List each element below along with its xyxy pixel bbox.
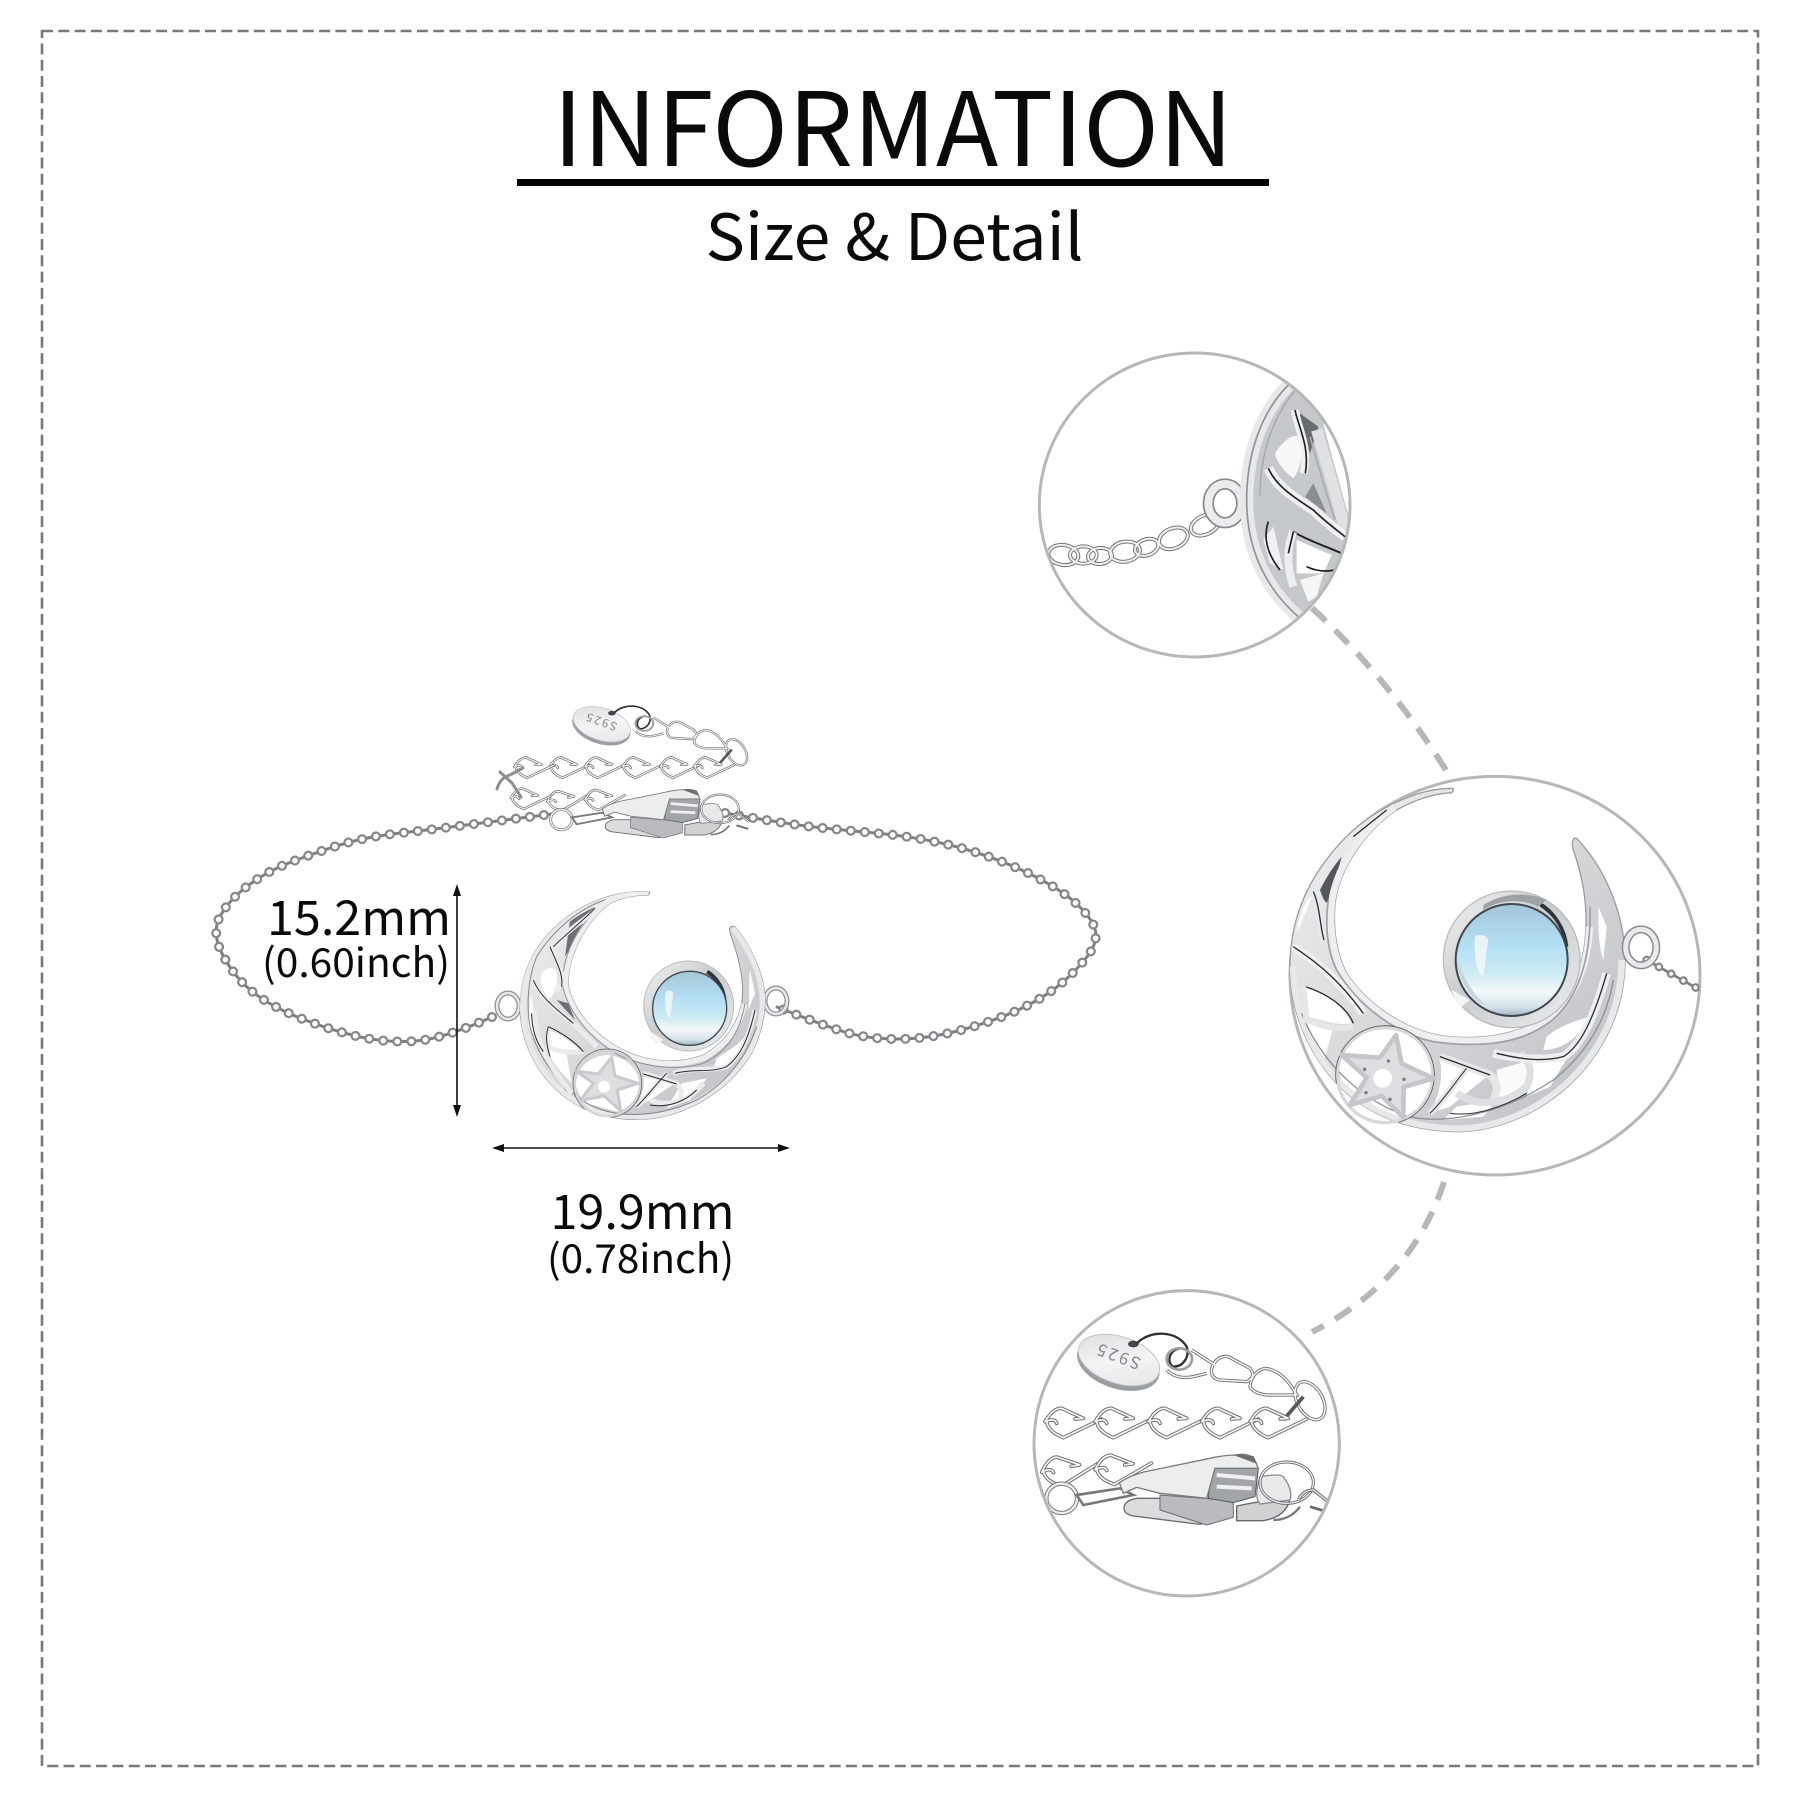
inner rim: [568, 895, 742, 1061]
chain right: [725, 813, 1096, 1039]
jump ring: [1208, 484, 1242, 523]
extender hook: [497, 768, 523, 797]
title underline: [517, 179, 1269, 186]
openwork holes: [528, 968, 755, 1112]
detail circle: chain and moon edge: [1039, 353, 1363, 657]
chain: [1047, 510, 1223, 567]
height arrow: [453, 884, 461, 1117]
extender and clasp: [511, 700, 751, 838]
detail circle: moon pendant: [1290, 776, 1700, 1175]
title: INFORMATION: [553, 49, 1233, 196]
height label inches: (0.60inch): [262, 931, 450, 989]
subtitle: Size & Detail: [706, 187, 1084, 279]
moon pendant: [520, 892, 765, 1120]
circle outline: [1039, 353, 1350, 657]
detail circle: extender and clasp: [1034, 1291, 1339, 1596]
width label: 19.9mm: [550, 1173, 734, 1243]
stone: [644, 961, 734, 1051]
left jump ring: [497, 993, 519, 1019]
circle outline: [1034, 1291, 1339, 1596]
right jump ring: [765, 988, 787, 1014]
dashed connector top: [1312, 608, 1449, 775]
height label: 15.2mm: [267, 879, 451, 949]
moon edge: [1247, 385, 1363, 618]
outer rim: [520, 892, 765, 1120]
clasp and extender: [1040, 1325, 1331, 1525]
circle outline: [1290, 776, 1700, 1175]
chain left: [216, 813, 560, 1042]
knot strands: [533, 907, 755, 1107]
moon: [1290, 788, 1656, 1132]
dashed connector bottom: [1312, 1182, 1444, 1332]
width label inches: (0.78inch): [547, 1227, 734, 1285]
width arrow: [492, 1144, 790, 1152]
chain stub: [1647, 960, 1700, 990]
dark knot lines: [532, 908, 755, 1107]
bracelet full view: [216, 700, 1096, 1120]
star: [575, 1051, 640, 1116]
